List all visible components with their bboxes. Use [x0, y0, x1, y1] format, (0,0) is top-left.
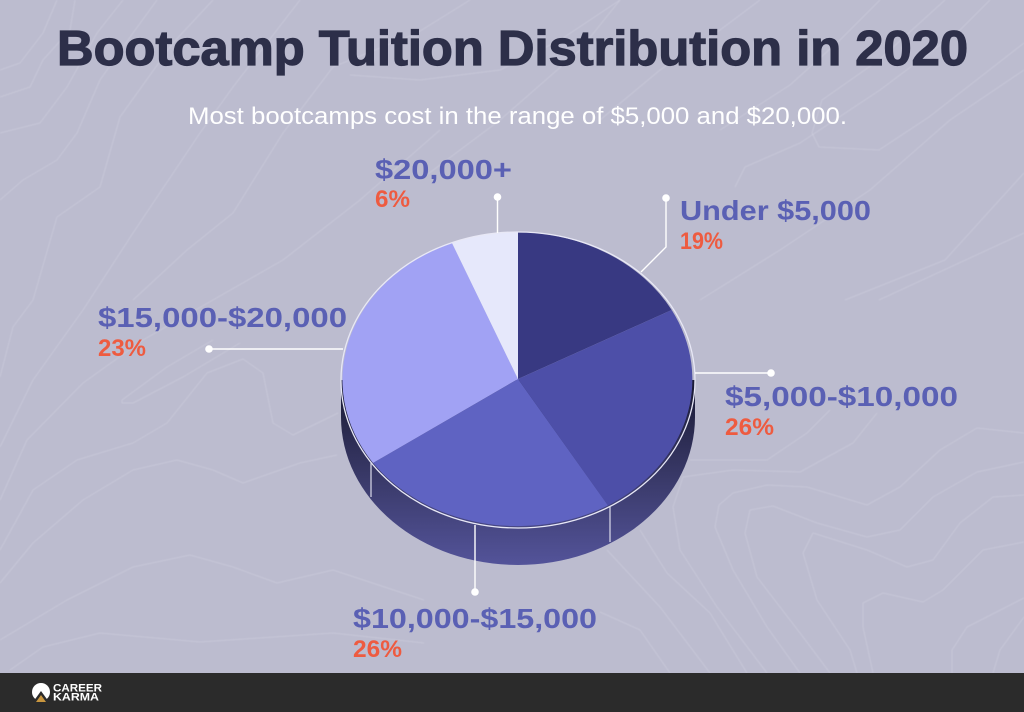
- label: Under $5,000: Under $5,000: [680, 195, 871, 226]
- pie chart: [341, 232, 695, 565]
- label: $15,000-$20,000: 23%: [98, 335, 146, 362]
- pie side wall: [341, 380, 695, 565]
- logo text: CAREER: [53, 682, 102, 694]
- leader line: $5,000-$10,000: [695, 369, 775, 377]
- leader line: $10,000-$15,000: [471, 525, 479, 596]
- label: $5,000-$10,000: $5,000-$10,000: [725, 381, 958, 412]
- leader line: $15,000-$20,000: [205, 345, 343, 353]
- slice: Under $5,000 19%: [518, 232, 672, 379]
- label: $20,000+: $20,000+: [375, 154, 512, 185]
- label: $10,000-$15,000: [353, 603, 597, 663]
- slice: $20,000+ 6%: [452, 232, 518, 379]
- label: Under $5,000: [680, 195, 871, 255]
- label: $10,000-$15,000: 26%: [353, 636, 402, 663]
- label: Under $5,000: 19%: [680, 228, 723, 255]
- label: $15,000-$20,000: $15,000-$20,000: [98, 302, 347, 333]
- label: $15,000-$20,000: [98, 302, 347, 362]
- label: $5,000-$10,000: [725, 381, 958, 441]
- logo: Career Karma: KARMA: [53, 692, 99, 704]
- side seams: [371, 463, 610, 542]
- leader line: $20,000+: [494, 193, 501, 233]
- title: Bootcamp Tuition Distribution in 2020: [57, 22, 968, 76]
- subtitle: Most bootcamps cost in the range of $5,000 and $20,000.: [188, 103, 847, 130]
- slice: $5,000-$10,000 26%: [518, 310, 692, 506]
- logo: Career Karma: [32, 682, 102, 704]
- label: $20,000+: 6%: [375, 186, 410, 213]
- label: $20,000+: [375, 154, 512, 213]
- label: $10,000-$15,000: $10,000-$15,000: [353, 603, 597, 634]
- leader line: Under $5,000: [641, 194, 670, 272]
- slice: $10,000-$15,000 26%: [373, 379, 608, 526]
- label: $5,000-$10,000: 26%: [725, 414, 774, 441]
- logo icon: [32, 683, 50, 702]
- slice: $15,000-$20,000 23%: [342, 243, 518, 463]
- footer bar: [0, 673, 1024, 712]
